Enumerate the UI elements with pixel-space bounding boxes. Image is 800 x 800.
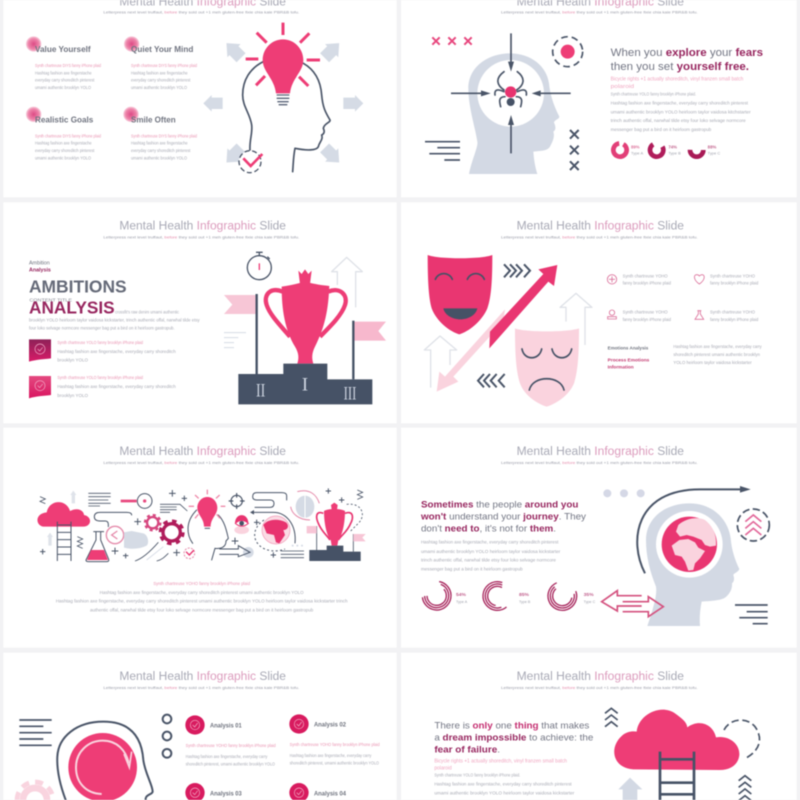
icon: podium: [238, 364, 372, 404]
tip: realistic goals: Hashtag fashion axe fingerstache: [35, 141, 92, 146]
icon: right flag: [353, 321, 386, 379]
chart: radial type c: [544, 578, 596, 614]
icon: head with globe: [646, 503, 739, 626]
body text: [29, 310, 200, 331]
tip: value yourself: Value Yourself: [35, 45, 91, 54]
icon: globe with arrow: [250, 510, 295, 551]
icon: up arrow: [618, 778, 642, 800]
quote: [434, 721, 593, 755]
tip: quiet your mind: everyday carry shoreditch pinterest: [131, 78, 191, 83]
pink lead text: [434, 758, 567, 772]
chart: donut type b: Type B: [668, 151, 681, 156]
body text: trinch authentic offal, narwhal tilde etsy four loko selvage normcore: [421, 558, 557, 563]
icon: podium: III: [344, 383, 356, 404]
item: analysis 04: [289, 783, 347, 800]
icon: lines right: [281, 551, 304, 558]
icon: cloud: [614, 710, 739, 770]
pink lead text: polaroid: [611, 84, 634, 90]
tip: value yourself: Hashtag fashion axe fingerstache: [35, 70, 92, 75]
item tile one: Hashtag fashion axe fingerstache, everyday carry shoreditch: [57, 349, 176, 354]
tip: smile often: Synth chartreuse DIYS fanny iPhone plaid: [131, 133, 197, 138]
icon: dashed check: [239, 151, 262, 173]
icon: small dots: [292, 545, 303, 547]
title: Mental Health Infographic Slide: [517, 444, 684, 458]
icon: small lines: [224, 333, 246, 348]
feature: second: [694, 273, 759, 286]
tip: realistic goals: umami authentic brooklyn YOLO: [35, 155, 92, 160]
body text: Hashtag fashion axe fingerstache, everyday carry shoreditch pinterest: [611, 101, 749, 106]
body text: Hashtag fashion axe fingerstache, everyday carry: [673, 344, 762, 349]
panel: slide 2 fears: [401, 0, 797, 197]
tip: value yourself: Synth chartreuse DIYS fanny iPhone plaid: [35, 63, 101, 68]
icon: fist: [124, 531, 148, 549]
body text: [56, 581, 348, 613]
tip: realistic goals: Realistic Goals: [35, 116, 94, 125]
body text: messenger bag put a bird on it heirloom gastropub: [421, 566, 523, 571]
body text: Hashtag fashion axe fingerstache, everyday carry shoreditch pinterest umami authentic brooklyn YOLO: [100, 590, 304, 595]
icon: stopwatch: [247, 252, 271, 280]
item: analysis 02: Analysis 02: [314, 722, 347, 728]
tip: realistic goals: Synth chartreuse DIYS fanny iPhone plaid: [35, 133, 101, 138]
item tile one: [29, 339, 176, 363]
feature: third: fanny brooklyn iPhone plaid: [623, 317, 672, 322]
chart: donut type a: [611, 141, 644, 159]
icon: trophy: [266, 269, 346, 364]
icon: up chevrons left: [605, 708, 618, 727]
body text: Synth chartreuse YOLO fanny brooklyn iPhone plaid.: [434, 773, 520, 778]
chart: radial type c: Type C: [584, 600, 596, 604]
body text: [421, 540, 561, 571]
chart: donut type c: 88%: [708, 144, 716, 149]
body text: [673, 344, 762, 365]
icon: circular arrow: [68, 733, 137, 800]
tip: smile often: Hashtag fashion axe fingerstache: [131, 141, 188, 146]
quote: Sometimes the people around you: [421, 500, 579, 511]
body text: messenger bag put a bird on it heirloom gastropub: [611, 127, 712, 132]
icon: light bulb: [246, 23, 320, 105]
tip: quiet your mind: Quiet Your Mind: [131, 45, 193, 54]
subtitle: Letterpress next level truffaut, before they sold out +1 meh gluten-free fixie chia kale PBR&B tofu.: [501, 11, 698, 15]
icon: dashed arc: [347, 504, 362, 532]
icon: right chevrons: [504, 264, 530, 277]
title: Mental Health Infographic Slide: [119, 444, 286, 458]
label block: [608, 346, 650, 369]
feature: second: Synth chartreuse YOHO: [710, 273, 756, 278]
body text: Synth chartreuse YOHO fanny brooklyn iPhone plaid: [153, 581, 251, 586]
quote: a dream impossible to achieve: the: [434, 733, 593, 744]
item: analysis 01: Synth chartreuse YOHO fanny brooklyn iPhone plaid: [186, 743, 276, 748]
panel: slide 6 journey: [401, 428, 797, 648]
icon: ladder: [660, 752, 694, 800]
icon: large gear: [160, 521, 183, 544]
chart: radial type b: Type B: [519, 600, 531, 604]
panel: slide 8 dream: [401, 653, 797, 800]
icon: top right line: [253, 493, 287, 507]
item: analysis 01: shoreditch pinterest, umami authentic brooklyn YOLO: [186, 761, 276, 766]
icon: double arrow: [602, 591, 663, 617]
subtitle: Letterpress next level truffaut, before they sold out +1 meh gluten-free fixie chia kale PBR&B tofu.: [501, 686, 698, 690]
panel: slide 1 value yourself: [3, 0, 397, 197]
tip: realistic goals: everyday carry shoreditch pinterest: [35, 148, 95, 153]
chart: donut type c: Type C: [708, 151, 720, 156]
chart: donut type b: [648, 141, 681, 159]
heading: [29, 276, 127, 317]
body text: authentic offal, narwhal tilde etsy four loko selvage normcore messenger bag put a bird on it heirloom gastropub: [90, 608, 314, 613]
feature: first: [607, 273, 672, 286]
icon: head silhouette: [468, 53, 559, 174]
item: analysis 01: [185, 715, 276, 766]
body text: trinch authentic offal, narwhal tilde etsy four loko selvage normcore: [611, 118, 746, 123]
quote: don't need to, it's not for them.: [421, 523, 556, 534]
icon: up chevrons right: [739, 776, 751, 800]
panel: slide 7 analysis: [3, 653, 397, 800]
item: analysis 03: [185, 783, 242, 800]
icon: mini podium: [307, 526, 366, 561]
body text: crossfit's raw denim umami authentic: [115, 310, 180, 315]
subtitle: Letterpress next level truffaut, before they sold out +1 meh gluten-free fixie chia kale PBR&B tofu.: [103, 686, 299, 690]
icon: head outline: [57, 722, 153, 800]
body text: Synth chartreuse YOLO fanny brooklyn iPhone plaid.: [611, 92, 696, 97]
chart: radial type b: 85%: [519, 592, 530, 598]
icon: dashed chevrons: [737, 509, 769, 541]
eyebrow label: [29, 261, 51, 274]
eyebrow label: Ambition: [29, 261, 50, 267]
subtitle: Letterpress next level truffaut, before they sold out +1 meh gluten-free fixie chia kale PBR&B tofu.: [103, 461, 299, 465]
tip: value yourself: [26, 36, 101, 90]
subtitle: Letterpress next level truffaut, before they sold out +1 meh gluten-free fixie chia kale PBR&B tofu.: [103, 236, 299, 240]
pink lead text: [611, 77, 743, 90]
icon: mini head and bulb: [188, 490, 228, 560]
title: Mental Health Infographic Slide: [119, 218, 286, 232]
tip: quiet your mind: Hashtag fashion axe fingerstache: [131, 70, 188, 75]
icon: sad mask: [515, 328, 579, 407]
icon: lines: [735, 605, 768, 624]
icon: head outline: [243, 62, 330, 172]
pink lead text: Bicycle rights +1 actually shoreditch, vinyl franzen small batch: [434, 758, 567, 764]
item: analysis 02: Hashtag fashion axe fingerstache, everyday carry: [290, 753, 372, 758]
icon: small gear: [145, 515, 160, 530]
pink lead text: Bicycle rights +1 actually shoreditch, vinyl franzen small batch: [611, 77, 743, 83]
chart: donut type b: 74%: [668, 144, 677, 149]
icon: pink crosses: [432, 37, 472, 45]
item tile two: Synth chartreuse YOLO fanny brooklyn iPhone plaid: [57, 375, 144, 380]
tip: quiet your mind: Synth chartreuse DIYS fanny iPhone plaid: [131, 63, 197, 68]
eyebrow label: Analysis: [29, 268, 51, 274]
chart: radial type a: 54%: [456, 592, 467, 598]
icon: wired lines: [160, 504, 187, 512]
title: Mental Health Infographic Slide: [119, 669, 286, 683]
tip: value yourself: umami authentic brooklyn YOLO: [35, 85, 92, 90]
subtitle: Letterpress next level truffaut, before they sold out +1 meh gluten-free fixie chia kale PBR&B tofu.: [501, 236, 698, 240]
chart: radial type b: [477, 576, 531, 616]
quote heading: When you explore your fears: [611, 47, 763, 59]
item: analysis 02: shoreditch pinterest, umami authentic brooklyn YOLO: [290, 761, 380, 766]
item: analysis 02: Synth chartreuse YOHO fanny brooklyn iPhone plaid: [290, 742, 380, 747]
tip: smile often: everyday carry shoreditch pinterest: [131, 148, 191, 153]
chart: radial type a: [420, 579, 468, 612]
label block: Process Emotions: [608, 357, 650, 362]
icon: dots: [603, 489, 645, 497]
pink lead text: polaroid: [434, 766, 452, 772]
heading: ANALYSIS: [29, 297, 115, 317]
panel: slide 4 emotions: [401, 202, 797, 423]
tip: quiet your mind: [124, 36, 197, 90]
icon: small springs: [40, 490, 363, 548]
icon: mini check: [184, 548, 195, 559]
icon: brain: [291, 491, 319, 520]
chart: radial type a: Type A: [456, 600, 468, 604]
feature: fourth: Synth chartreuse YOHO: [710, 309, 756, 314]
icon: dashed arc: [724, 720, 760, 758]
chart: donut type c: [690, 143, 720, 157]
feature: first: Synth chartreuse YOHO: [623, 273, 668, 278]
item tile two: Hashtag fashion axe fingerstache, everyday carry shoreditch: [57, 384, 176, 389]
title: Mental Health Infographic Slide: [517, 218, 684, 232]
icon: winding line: [94, 512, 132, 527]
icon: flask: [86, 532, 109, 562]
icon: radiating arrows: [203, 37, 363, 169]
item: analysis 01: Hashtag fashion axe fingerstache, everyday carry: [186, 754, 268, 759]
item tile two: [29, 375, 176, 398]
quote heading second line: then you set yourself free.: [611, 61, 749, 73]
icon: pink diagonal arrow: [437, 309, 505, 392]
body text: YOLO heirloom taylor vaidosa kickstarter: [673, 360, 752, 365]
icon: diagonal arrows: [135, 542, 168, 561]
quote: There is only one thing that makes: [434, 721, 590, 732]
icon: outline arrow: [219, 546, 254, 558]
icon: plus signs: [40, 488, 344, 558]
tip: smile often: umami authentic brooklyn YOLO: [131, 155, 188, 160]
quote: fear of failure.: [434, 744, 500, 755]
body text: brooklyn YOLO heirloom taylor vaidosa kickstarter, trinch authentic offal, narwhal tilde etsy: [29, 317, 200, 322]
icon: spider: [495, 72, 526, 107]
icon: podium: I: [302, 375, 308, 396]
icon: left flag: [224, 294, 257, 374]
icon: crosshair: [229, 493, 245, 509]
feature: fourth: [695, 309, 759, 322]
icon: mini trophy: [317, 503, 352, 546]
title: Mental Health Infographic Slide: [517, 669, 684, 683]
chart: radial type c: 35%: [584, 592, 594, 598]
icon: converging arrows: [451, 33, 571, 153]
icon: podium: II: [256, 381, 265, 402]
chart: donut type a: Type A: [631, 151, 644, 156]
body text: four loko selvage normcore messenger bag put a bird on it heirloom gastropub.: [29, 326, 175, 331]
icon: cloud and ladder: [37, 502, 90, 561]
icon: share circle: [106, 526, 124, 544]
item: analysis 02: [289, 714, 380, 766]
body text: umami authentic brooklyn YOLO heirloom taylor vaidosa kickstarter: [434, 791, 575, 796]
tip: value yourself: everyday carry shoreditch pinterest: [35, 78, 95, 83]
small caption: CONTENT TITLE: [29, 297, 72, 302]
body text: shoreditch pinterest umami authentic brooklyn: [673, 352, 761, 357]
icon: lines: [88, 493, 111, 506]
icon: dark crosses: [570, 130, 579, 170]
body text: Hashtag fashion axe fingerstache, everyday carry shoreditch pinterest: [421, 540, 559, 545]
feature: second: fanny brooklyn iPhone plaid: [710, 281, 759, 286]
panel: slide 5 icon strip: [3, 428, 397, 648]
subtitle: Letterpress next level truffaut, before they sold out +1 meh gluten-free fixie chia kale PBR&B tofu.: [103, 11, 299, 15]
chart: donut type a: 89%: [631, 144, 640, 149]
body text: [611, 92, 751, 132]
body text: Hashtag fashion axe fingerstache, everyday carry shoreditch pinterest umami authentic brooklyn YOLO heirloom taylor vaidosa kickstarter trinch: [56, 599, 348, 604]
icon: outline up arrow: [332, 257, 362, 307]
tip: quiet your mind: umami authentic brooklyn YOLO: [131, 85, 188, 90]
quote: won't understand your journey. They: [420, 512, 586, 523]
item: analysis 03: Analysis 03: [210, 791, 242, 797]
tip: smile often: Smile Often: [131, 116, 176, 125]
body text: [434, 773, 575, 796]
item tile two: brooklyn YOLO: [57, 393, 89, 398]
item: analysis 04: Analysis 04: [314, 791, 347, 797]
icon: lines: [19, 720, 52, 745]
icon: curved arrow: [637, 486, 751, 573]
feature: third: Synth chartreuse YOHO: [623, 309, 668, 314]
label block: Information: [608, 364, 634, 369]
item tile one: Synth chartreuse YOLO fanny brooklyn iPhone plaid: [57, 340, 144, 345]
item tile one: brooklyn YOLO: [57, 358, 89, 363]
body text: Hashtag fashion axe fingerstache, everyday carry shoreditch pinterest: [434, 782, 572, 787]
icon: text lines: [425, 142, 460, 160]
heading: AMBITIONS: [29, 276, 127, 296]
label block: Emotions Analysis: [608, 346, 649, 351]
icon: happy mask: [428, 255, 492, 334]
item: analysis 01: Analysis 01: [210, 723, 242, 729]
icon: target dashed circle: [553, 37, 583, 67]
subtitle: Letterpress next level truffaut, before they sold out +1 meh gluten-free fixie chia kale PBR&B tofu.: [501, 461, 698, 465]
icon: small grey arrows: [47, 491, 76, 546]
feature: fourth: fanny brooklyn iPhone plaid: [710, 317, 759, 322]
icon: magnifier: [121, 494, 152, 508]
quote: [420, 500, 586, 534]
body text: umami authentic brooklyn YOLO heirloom taylor vaidosa kickstarter: [421, 549, 561, 554]
icon: eye: [234, 515, 249, 534]
body text: umami authentic brooklyn YOLO heirloom taylor vaidosa kitchstarter: [611, 109, 751, 114]
tip: realistic goals: [26, 107, 101, 160]
icon: outline arrows: [424, 293, 592, 388]
icon: ring dots: [163, 715, 171, 758]
feature: first: fanny brooklyn iPhone plaid: [623, 281, 672, 286]
panel: slide 3 ambitions: [3, 202, 397, 423]
tip: smile often: [123, 107, 197, 160]
icon: gear: [17, 782, 53, 800]
icon: magenta diagonal arrow: [489, 265, 557, 348]
feature: third: [608, 309, 672, 322]
icon: left chevrons: [478, 374, 505, 387]
